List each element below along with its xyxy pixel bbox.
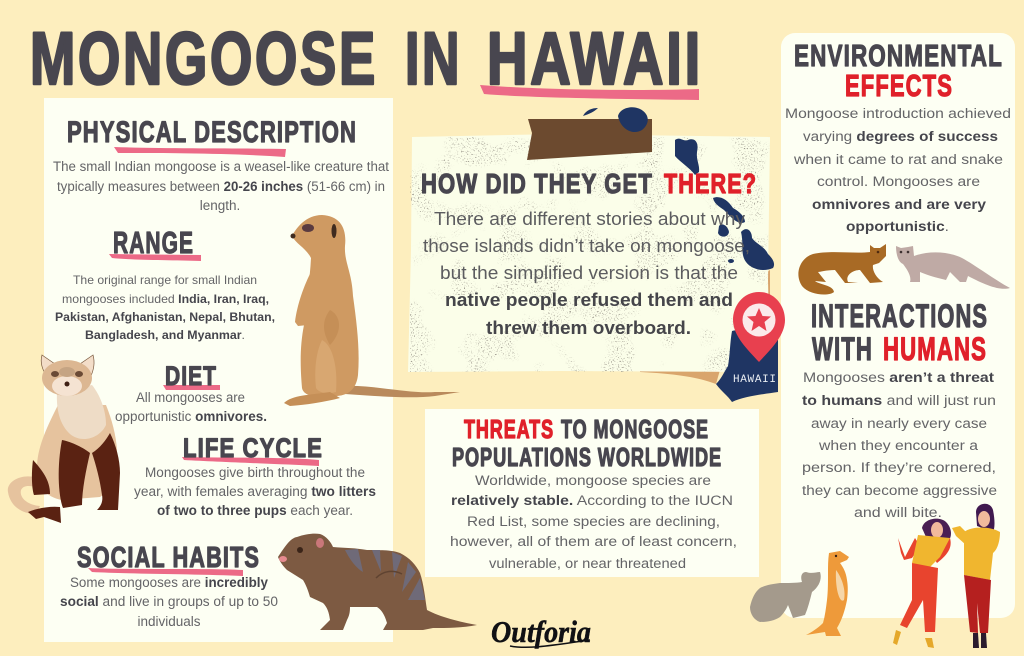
text: threats [450,473,737,571]
panel: left column [44,98,393,642]
heading: environmental effects [794,38,1003,103]
text: physical description: length. [200,198,240,213]
heading: interactions with humans: WITH [812,331,873,367]
text: interactions with humans: Mongooses aren’t a threat [803,370,995,385]
text: how did they get there: those islands didn’t take on mongoose, [423,236,750,256]
text: life cycle [134,465,376,518]
text: social habits: individuals [137,614,201,629]
text: social habits: social and live in groups of up to 50 [60,594,278,609]
text: range [55,273,275,342]
text: diet: opportunistic omnivores. [115,409,267,424]
heading: threats: TO MONGOOSE [561,414,709,444]
text: interactions with humans: they can become aggressive [802,483,997,498]
heading: range [109,225,201,261]
text: how did they get there: threw them overboard. [486,318,691,338]
heading: how did they get there: THERE? [664,168,757,199]
text: life cycle: Mongooses give birth throughout the [145,465,365,480]
heading: how did they get there: HOW DID THEY GET [421,168,653,199]
title: HAWAII [487,17,703,100]
heading: threats: THREATS [464,414,554,444]
text: threats: vulnerable, or near threatened [489,556,686,571]
text: physical description: The small Indian mongoose is a weasel-like creature that [53,159,389,174]
woman with hand on mouth [952,504,1000,648]
text: interactions with humans: and will bite. [854,505,942,520]
heading: range: RANGE [113,225,194,260]
logo: outforia: Outforia [491,614,591,649]
heading: threats [452,414,722,472]
text: environmental effects: Mongoose introduction achieved [785,106,1011,121]
text: environmental effects: varying degrees of success [803,129,998,144]
icon: hawaii map pin [716,292,785,402]
title: IN [405,17,462,100]
text: range: mongooses included India, Iran, Iraq, [62,292,269,306]
text: range: Bangladesh, and Myanmar . [85,328,245,342]
text: environmental effects: omnivores and are very [812,197,987,212]
text: interactions with humans: away in nearly every case [811,416,987,431]
text: environmental effects [785,106,1011,234]
text: physical description [53,159,389,213]
icon: standing meerkat [284,215,460,406]
heading: threats: POPULATIONS WORLDWIDE [452,442,722,472]
icon: two women [893,504,1000,648]
title: MONGOOSE [30,17,378,100]
text: interactions with humans: when they encounter a [818,438,979,453]
panel: right column [781,33,1015,618]
text: diet [115,390,267,424]
heading: diet: DIET [165,361,217,391]
woman pointing [893,519,951,648]
text: how did they get there: There are different stories about why [434,209,745,229]
text: threats: Red List, some species are declining, [467,514,720,529]
heading: physical description: PHYSICAL DESCRIPTION [67,116,357,149]
text: social habits: Some mongooses are incredibly [70,575,268,590]
text: diet: All mongooses are [136,390,245,405]
heading: physical description [67,116,357,157]
icon: two mongooses [798,244,1010,294]
text: threats: however, all of them are of least concern, [450,534,737,549]
heading: interactions with humans [811,298,988,367]
text: interactions with humans [802,370,997,520]
text: how did they get there [423,209,750,338]
icon: hawaiian islands [583,107,774,270]
text: interactions with humans: person. If they’re cornered, [802,460,996,475]
icon: grey mongoose and orange meerkat [750,551,849,636]
text: social habits [60,575,278,629]
icon: brown mongoose [278,534,477,630]
text: range: The original range for small Indian [73,273,257,287]
text: range: Pakistan, Afghanistan, Nepal, Bhutan, [55,310,275,324]
text: life cycle: year, with females averaging two litters [134,484,376,499]
text: threats: Worldwide, mongoose species are [475,473,711,488]
text: how did they get there: native people refused them and [445,290,733,310]
heading: social habits: SOCIAL HABITS [77,542,260,574]
text: threats: relatively stable. According to the IUCN [451,493,733,508]
text: how did they get there: but the simplified version is that the [440,263,738,283]
text: environmental effects: control. Mongooses are [817,174,980,189]
text: physical description: typically measures between 20-26 inches (51-66 cm) in [57,179,385,194]
icon: tape [527,119,652,160]
text: life cycle: of two to three pups each year. [157,503,353,518]
panel: how did they get there [408,107,774,384]
icon: hawaii map pin: HAWAII [733,374,776,386]
text: interactions with humans: to humans and will just run [802,393,996,408]
text: environmental effects: when it came to rat and snake [793,152,1003,167]
icon: ferret [8,355,120,523]
panel: threats [425,409,759,577]
text: environmental effects: opportunistic . [846,219,949,234]
heading: environmental effects: EFFECTS [845,68,953,103]
heading: life cycle: LIFE CYCLE [183,433,323,463]
